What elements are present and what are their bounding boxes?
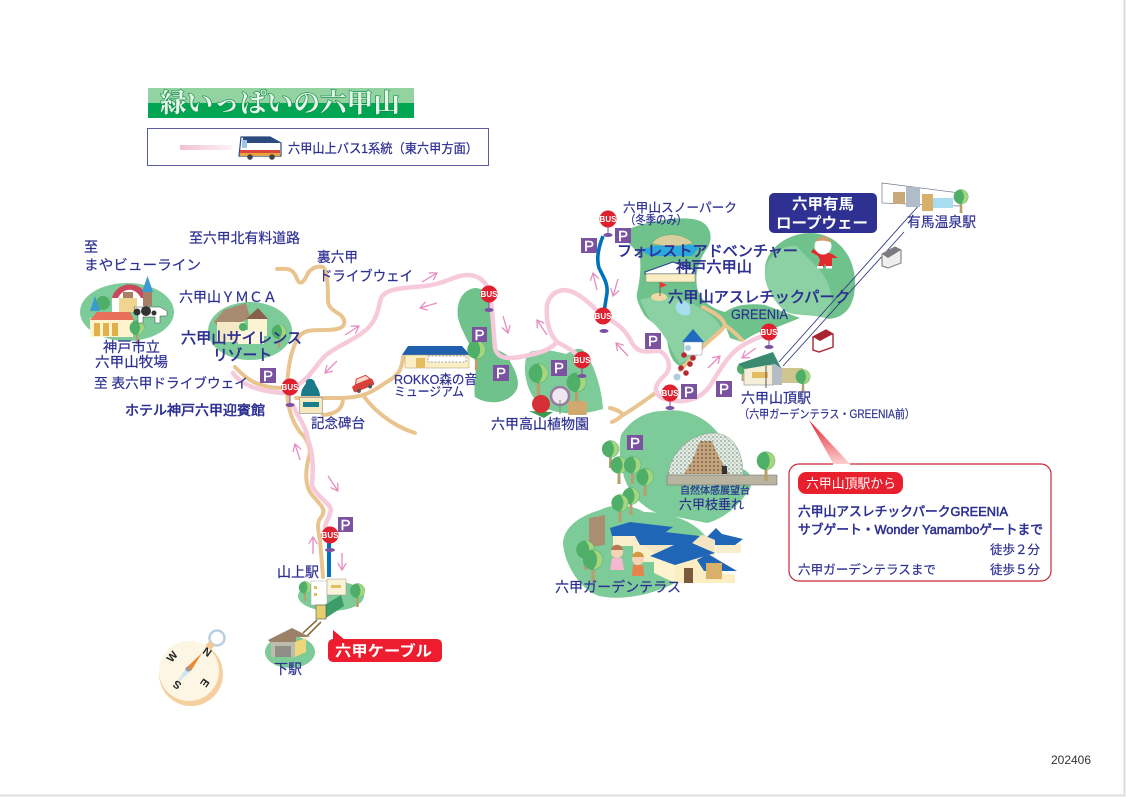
date code: 202406 (1051, 753, 1091, 767)
bus stops: BUS (761, 328, 778, 337)
direction arrows (295, 273, 756, 570)
map labels: 六甲山牧場 (95, 354, 168, 370)
cable lines (303, 236, 607, 636)
parking markers: P (554, 360, 564, 377)
parking markers: P (618, 228, 628, 245)
icon: compass: N (200, 645, 213, 660)
map labels: 自然体感展望台 (680, 484, 750, 497)
icon: pond (676, 301, 690, 315)
map labels: GREENIA (731, 306, 789, 322)
ropeway lines (779, 203, 921, 366)
icon: lower cable station (268, 628, 310, 657)
map labels: 裏六甲 (317, 249, 358, 265)
parking markers: P (474, 327, 485, 344)
callout: 徒歩５分 (990, 562, 1040, 577)
icon: upper cable station (299, 579, 365, 619)
map labels: 至 (84, 239, 98, 255)
bus stops: BUS (662, 389, 679, 398)
map labels: 六甲枝垂れ (679, 497, 744, 512)
bus stops: BUS (574, 356, 591, 365)
parking markers: P (496, 365, 506, 382)
icon: mascot (811, 236, 838, 268)
bus stops (282, 210, 778, 552)
icon: music museum (402, 340, 486, 370)
map labels: フォレストアドベンチャー (617, 243, 798, 260)
callout: 六甲山頂駅から (806, 476, 896, 491)
bus route (233, 275, 766, 527)
map labels: 六甲山アスレチックパーク (668, 289, 850, 306)
ropeway label: ロープウェー (776, 215, 868, 232)
icon: Rokko Shidare (667, 433, 777, 485)
icon: tower and flowers (674, 329, 704, 380)
cable car label (328, 630, 442, 662)
title: 緑いっぱいの六甲山 (160, 83, 400, 120)
parking markers: P (630, 435, 640, 452)
map labels: 六甲山スノーパーク (623, 201, 737, 215)
parking markers: P (684, 384, 694, 401)
parking markers: P (719, 381, 729, 398)
roads (235, 267, 742, 577)
icon: snow park (640, 235, 700, 256)
map labels (84, 201, 976, 677)
icon: compass: S (171, 677, 184, 691)
icon: farm (90, 276, 167, 344)
map labels: まやビューライン (84, 257, 201, 273)
map labels: ドライブウェイ (319, 268, 413, 284)
legend (148, 128, 488, 166)
parking markers: P (584, 238, 594, 255)
icon: gray gondola (882, 247, 901, 268)
map labels: 下駅 (274, 661, 302, 677)
callout: 六甲ガーデンテラスまで (798, 562, 936, 577)
callout: サブゲート・Wonder Yamamboゲートまで (798, 522, 1043, 537)
icon: compass: E (197, 676, 211, 689)
icon: forest adventure lodge (645, 262, 695, 301)
callout: 徒歩２分 (990, 542, 1040, 557)
map labels: 有馬温泉駅 (907, 214, 976, 230)
map labels: 六甲山ＹＭＣＡ (179, 289, 277, 305)
map labels: 六甲山頂駅 (741, 390, 811, 406)
map labels: 神戸六甲山 (676, 259, 752, 276)
map labels: 至 表六甲ドライブウェイ (94, 375, 248, 391)
icon: Garden Terrace buildings (576, 515, 743, 583)
parking markers (260, 228, 732, 534)
bus stops: BUS (481, 290, 498, 299)
map labels: 記念碑台 (311, 416, 365, 431)
icon: silence resort (214, 303, 286, 348)
parking markers: P (340, 517, 351, 534)
legend: 六甲山上バス1系統（東六甲方面） (288, 141, 478, 156)
map labels: （冬季のみ） (625, 212, 687, 227)
icon: compass (159, 630, 224, 706)
green areas (80, 218, 855, 668)
icon: red gondola (813, 330, 833, 352)
map labels: （六甲ガーデンテラス・GREENIA前） (739, 407, 915, 421)
map labels: ホテル神戸六甲迎賓館 (125, 403, 265, 418)
map labels: 山上駅 (277, 564, 319, 580)
callout: 六甲山アスレチックパークGREENIA (798, 504, 1008, 519)
icon: bus (239, 137, 281, 160)
map labels: 六甲高山植物園 (491, 416, 589, 432)
bus stops: BUS (595, 312, 612, 321)
icon: Rokko summit station (737, 352, 810, 393)
trees: Rokko Shidare area (602, 440, 654, 522)
icon: children (610, 545, 644, 576)
parking markers: P (263, 368, 273, 385)
map labels: 六甲ガーデンテラス (555, 579, 681, 595)
map labels: リゾート (213, 347, 272, 364)
icon: car (350, 373, 375, 395)
bus stops: BUS (600, 215, 617, 224)
bus stops: BUS (322, 531, 339, 540)
cable car label: 六甲ケーブル (335, 642, 432, 660)
parking markers: P (648, 333, 658, 350)
icon: alpine plants (529, 363, 587, 418)
icon: monument (300, 379, 322, 414)
map labels: ROKKO森の音 (394, 372, 477, 387)
ropeway label: 六甲有馬 (792, 195, 854, 213)
map labels: 至六甲北有料道路 (189, 230, 300, 246)
map labels: 六甲山サイレンス (181, 330, 302, 347)
bus stops: BUS (282, 383, 299, 392)
callout (789, 420, 1051, 581)
icon: compass: W (165, 649, 181, 665)
map labels: 神戸市立 (103, 339, 160, 355)
ropeway label (769, 193, 877, 233)
icon: Arima Onsen station (882, 183, 968, 213)
map labels: ミュージアム (394, 385, 464, 399)
